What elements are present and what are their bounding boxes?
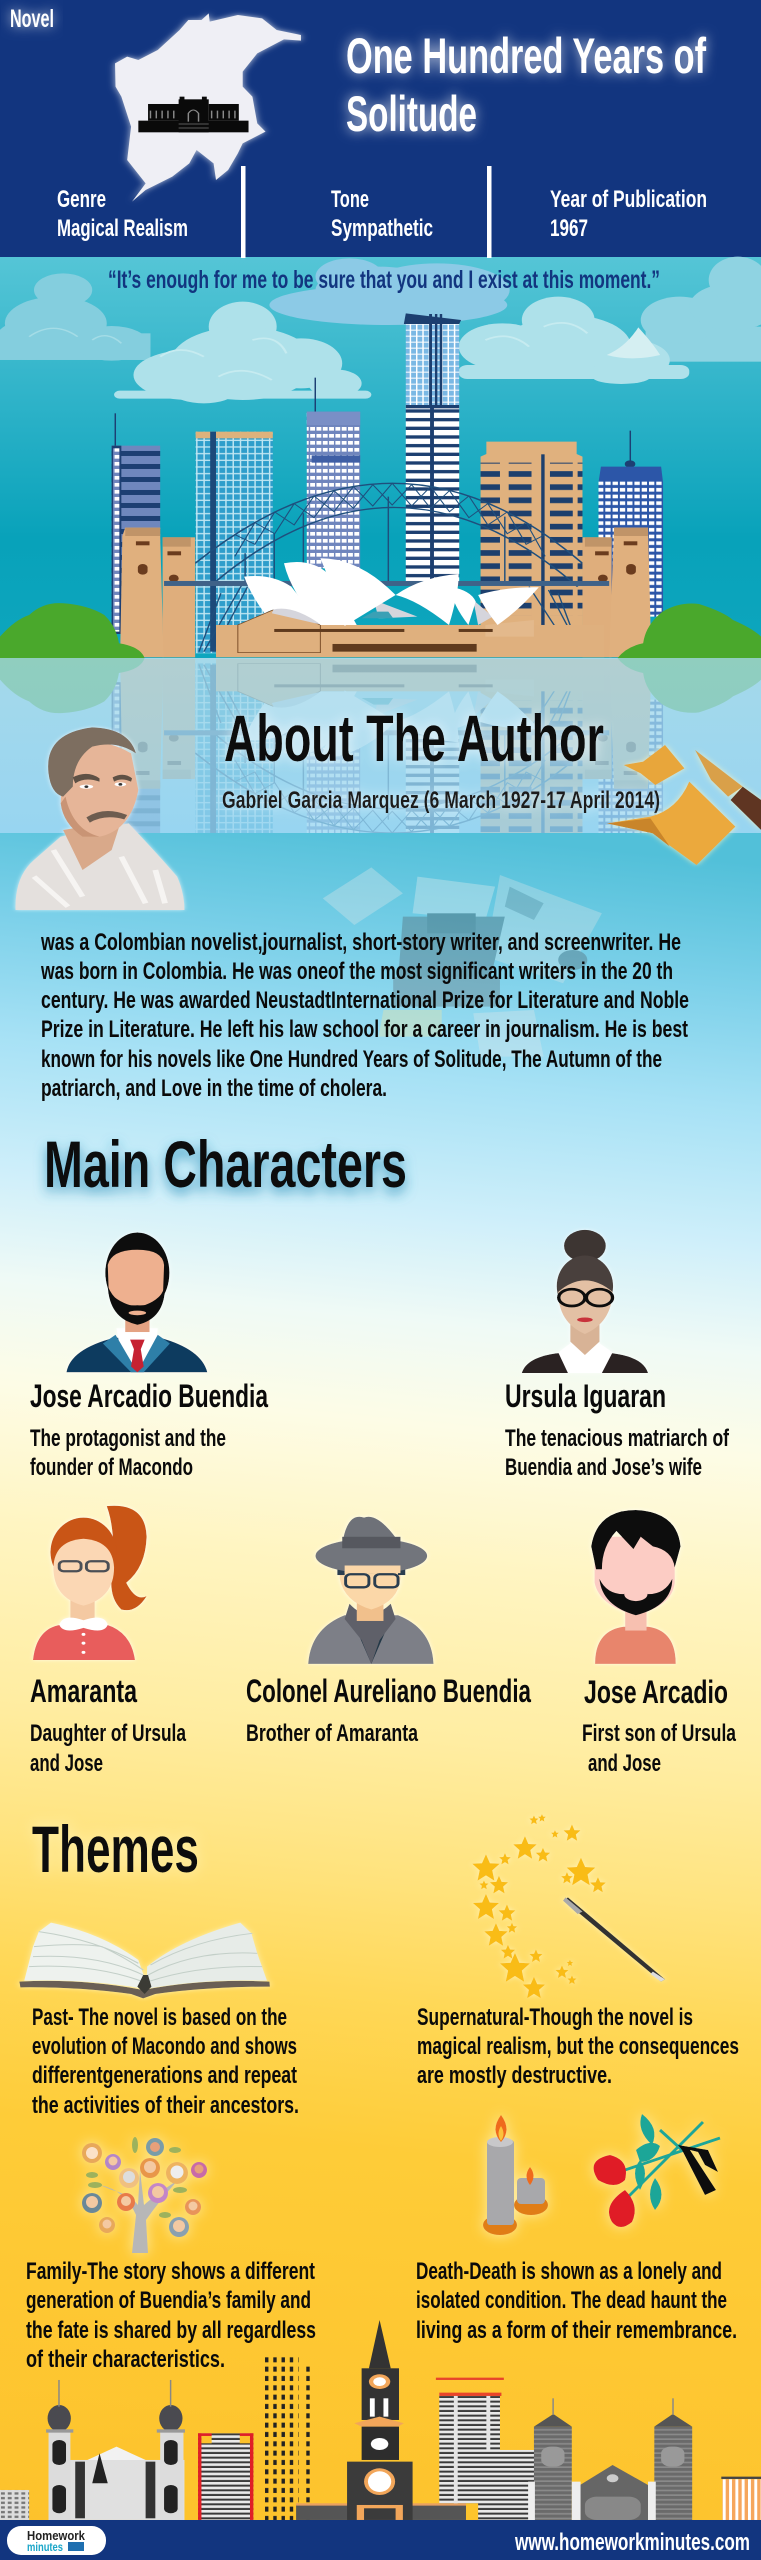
grey office tower [436,2378,504,2503]
striped block [478,2450,536,2520]
divider 1 [241,166,246,258]
heading: main characters: Main Characters [44,1127,407,1201]
heading: themes: Themes [32,1812,199,1886]
theme text: family [26,2258,316,2373]
tower 1 [112,413,160,634]
right bridge pylon [582,528,651,657]
theme text: past: Past- The novel is based on the [32,2004,287,2031]
header text [10,5,707,294]
clouds [0,257,761,403]
tallest tower [404,313,461,582]
year of publication [550,186,707,242]
portrait: Jose Arcadio Buendia [66,1233,207,1372]
bush right [617,604,761,658]
label: novel: Novel [10,5,54,33]
character: Jose Arcadio [582,1674,736,1777]
character: Ursula Iguaran: Ursula Iguaran [505,1378,666,1414]
portrait: Amaranta [33,1506,147,1660]
portrait of Gabriel Garcia Marquez [15,727,184,910]
biography paragraph [40,929,689,1102]
cloud: right [459,297,689,384]
year of publication: Year of Publication [550,186,707,213]
character: Ursula Iguaran [505,1378,730,1481]
city scene: Sydney skyline [0,313,761,658]
theme text: past: differentgenerations and repeat [32,2062,297,2089]
left bridge pylon [120,528,195,657]
cloud: small white wisp [607,327,660,358]
character: Amaranta: Amaranta [30,1673,137,1709]
icon: memorial candles [483,2115,548,2235]
year of publication: 1967 [550,215,588,242]
logo: homework minutes: minutes [27,2540,63,2554]
bridge deck [164,581,609,586]
red framed building [198,2433,253,2520]
theme text: family: the fate is shared by all regardless [26,2317,316,2344]
icon: open book and fountain pen [607,745,761,865]
about the author panel [15,701,761,1102]
character: Amaranta: Daughter of Ursula [30,1720,186,1747]
character portraits [33,1230,681,1664]
lower background gradient [0,833,761,2560]
icon: roses with black ribbon [594,2114,720,2227]
theme text: past: evolution of Macondo and shows [32,2033,297,2060]
character: Jose Arcadio Buendia: founder of Macondo [30,1454,193,1481]
theme text: death [416,2258,737,2344]
character: Jose Arcadio Buendia [30,1378,268,1481]
tower 2 [196,432,273,653]
cathedral [46,2380,185,2520]
icon: family tree [82,2137,207,2253]
map of Macondo with building [115,13,301,202]
icon: castle [138,97,249,132]
right tower [598,431,663,617]
theme text: past [32,2004,299,2119]
icon: magic wand and stars [472,1814,665,1998]
genre: Magical Realism [57,215,188,242]
header band [0,0,761,258]
footer band [0,2520,761,2560]
clock tower [347,2320,413,2520]
opera house [216,558,604,657]
tower 3 [307,378,360,568]
portrait: Colonel Aureliano Buendia [308,1517,433,1664]
icon: typewriter and papers, faint [323,867,602,1057]
character: Colonel Aureliano Buendia [246,1673,531,1747]
bottom city skyline [0,2320,761,2520]
water panel with reflection [0,658,761,833]
character: Amaranta [30,1673,186,1777]
cloud: centre [114,302,371,403]
harbour bridge arch [195,483,582,652]
title: Solitude [346,86,477,142]
right cathedral [528,2398,692,2520]
bush left [0,603,145,658]
theme text: family: generation of Buendia’s family and [26,2287,311,2314]
character: Jose Arcadio: and Jose [588,1750,661,1777]
theme text: supernatural [417,2004,739,2089]
title [346,28,706,142]
tone [331,186,433,242]
tan tower [481,442,582,653]
character: Amaranta: and Jose [30,1750,103,1777]
logo: homework minutes: Homework [27,2528,86,2543]
cloud: far right [641,257,761,362]
theme text: family: of their characteristics. [26,2346,225,2373]
sky panel [0,257,761,659]
cloud: top centre [269,258,510,325]
character: Colonel Aureliano Buendia: Brother of Amaranta [246,1720,418,1747]
character: Jose Arcadio Buendia: The protagonist and the [30,1425,226,1452]
biography paragraph: patriarch, and Love in the time of cholera. [41,1075,387,1102]
genre [57,186,188,242]
portrait: Ursula Iguaran [522,1230,648,1373]
portrait: Jose Arcadio [591,1510,681,1664]
genre: Genre [57,186,106,213]
logo: homework minutes [7,2526,106,2555]
icon: open book [19,1923,270,1998]
theme text: family: Family-The story shows a different [26,2258,315,2285]
tone: Sympathetic [331,215,433,242]
divider 2 [487,166,492,258]
low wings [296,2503,466,2520]
left low block [0,2490,29,2520]
cloud: far left [0,273,150,361]
theme text: past: the activities of their ancestors. [32,2092,299,2119]
character: Jose Arcadio Buendia: Jose Arcadio Buendia [30,1378,268,1414]
dotted tower [265,2357,313,2520]
tone: Tone [331,186,369,213]
right orange block [721,2477,761,2520]
theme text: supernatural: are mostly destructive. [417,2062,612,2089]
character: Colonel Aureliano Buendia: Colonel Aureliano Buendia [246,1673,531,1709]
